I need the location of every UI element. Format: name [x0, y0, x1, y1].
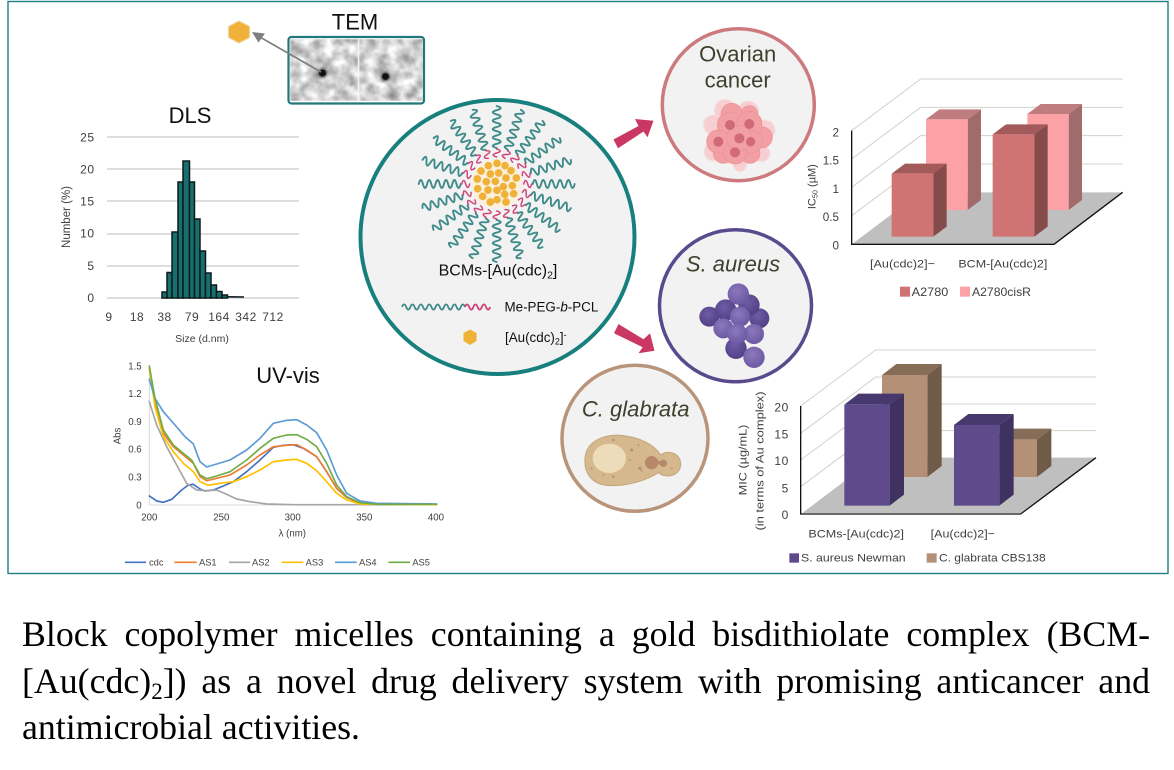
- chart: IC50 3D bars: 1.5: [823, 154, 839, 167]
- chart: DLS histogram: 164: [208, 310, 230, 324]
- chart: DLS histogram: [61, 130, 299, 345]
- chart: UV-vis spectra: 400: [428, 512, 444, 523]
- label: [Au(cdc)2]-: -: [564, 330, 567, 340]
- caption text: antimicrobial activities.: [22, 707, 360, 747]
- chart: DLS histogram: 9: [105, 310, 113, 324]
- chart: DLS histogram: 20: [80, 162, 94, 176]
- icon: tumour cell cluster: [703, 99, 775, 172]
- chart: IC50 3D bars: (µM): [807, 164, 819, 190]
- label: BCMs-[Au(cdc)2]: 2: [547, 270, 553, 282]
- chart: DLS histogram: 712: [262, 310, 284, 324]
- chart: UV-vis spectra: λ (nm): [279, 529, 306, 540]
- chart: IC50 3D bars: BCM-[Au(cdc)2]: [958, 258, 1047, 270]
- chart: IC50 3D bars: 0.5: [823, 211, 839, 224]
- chart: MIC 3D bars: BCMs-[Au(cdc)2]: [808, 528, 904, 540]
- label: [Au(cdc)2]-: 2: [555, 336, 560, 346]
- chart: DLS histogram: 5: [87, 259, 94, 273]
- panel: ovarian cancer circle: [662, 29, 814, 181]
- panel: S. aureus circle: [660, 230, 812, 382]
- chart: MIC 3D bars: [738, 350, 1096, 565]
- chart: DLS histogram: 342: [235, 310, 257, 324]
- chart: MIC 3D bars: 20: [774, 401, 789, 415]
- chart: DLS histogram: 38: [157, 310, 172, 324]
- diagram: micelle polymer chains and core: [419, 106, 575, 262]
- chart: DLS histogram: 18: [130, 310, 144, 324]
- bar: C. glabrata complex: [992, 429, 1051, 477]
- label: Ovarian cancer: [699, 42, 776, 93]
- panel: micelle circle: [360, 100, 634, 374]
- caption text: Block copolymer micelles containing a gold bisdithiolate complex (BCM-: [22, 614, 1150, 654]
- chart: IC50 3D bars: [Au(cdc)2]−: [870, 258, 935, 270]
- chart: MIC 3D bars: MIC (µg/mL): [738, 424, 750, 495]
- arrow: micelle to ovarian cancer: [614, 119, 654, 148]
- legend: cell lines: [900, 286, 1031, 299]
- chart: UV-vis spectra: [113, 361, 444, 567]
- chart: IC50 3D bars: 50: [811, 190, 820, 198]
- bar: A2780cisR complex: [926, 109, 981, 210]
- bar: S. aureus complex: [954, 414, 1014, 506]
- label: [Au(cdc)2]-: ]: [560, 330, 564, 345]
- caption text: [Au(cdc)2]) as a novel drug delivery system with promising anticancer and: [22, 660, 1150, 704]
- chart: MIC 3D bars: 10: [774, 454, 789, 468]
- label: Ovarian cancer: Ovarian: [699, 42, 776, 67]
- chart: UV-vis spectra: 250: [213, 512, 229, 523]
- chart: IC50 3D bars: [807, 79, 1123, 299]
- label: BCMs-[Au(cdc)2]: ]: [553, 262, 557, 280]
- chart: UV-vis spectra: Abs: [113, 428, 124, 444]
- legend: organisms: [789, 553, 1046, 565]
- heading: DLS: DLS: [169, 103, 211, 128]
- caption text: [22, 614, 1150, 747]
- icon: staphylococcus cluster: [699, 283, 769, 368]
- icon: gold complex hexagon: [228, 21, 250, 43]
- chart: UV-vis spectra: 200: [141, 512, 157, 523]
- legend: cell lines: A2780: [912, 286, 949, 299]
- chart: UV-vis spectra: 1.5: [128, 361, 142, 372]
- label: Ovarian cancer: cancer: [705, 68, 771, 93]
- chart: DLS histogram: 15: [80, 194, 94, 208]
- chart: UV-vis spectra: 300: [285, 512, 301, 523]
- chart: UV-vis spectra: 350: [356, 512, 372, 523]
- chart: UV-vis spectra: 0.9: [128, 417, 142, 428]
- heading: TEM: TEM: [332, 10, 378, 34]
- chart: MIC 3D bars: 0: [782, 508, 789, 522]
- legend: UV-vis series: AS3: [306, 557, 323, 567]
- chart: UV-vis spectra: 1.2: [128, 389, 142, 400]
- bar: A2780 complex: [892, 164, 947, 237]
- chart: IC50 3D bars: 2: [833, 127, 839, 140]
- bar: C. glabrata BCM: [882, 364, 942, 477]
- legend: UV-vis series: AS5: [412, 557, 430, 567]
- legend: organisms: S. aureus Newman: [801, 553, 906, 565]
- bar: A2780 BCM: [993, 124, 1048, 237]
- label: BCMs-[Au(cdc)2]: BCMs-[Au(cdc): [439, 262, 547, 280]
- chart: IC50 3D bars: IC: [807, 198, 819, 209]
- legend: UV-vis series: AS2: [252, 557, 270, 567]
- chart: UV-vis spectra: 0.6: [128, 445, 142, 456]
- chart: DLS histogram: Size (d.nm): [175, 333, 229, 345]
- legend: organisms: C. glabrata CBS138: [939, 553, 1046, 565]
- chart: MIC 3D bars: 15: [774, 427, 789, 441]
- chart: DLS histogram: 79: [185, 310, 199, 324]
- chart: MIC 3D bars: 5: [782, 481, 789, 495]
- label: C. glabrata: C. glabrata: [582, 397, 690, 422]
- legend: UV-vis series: [125, 557, 430, 567]
- chart: MIC 3D bars: [Au(cdc)2]−: [931, 528, 995, 540]
- legend: UV-vis series: AS4: [359, 557, 377, 567]
- arrow: micelle to microbes: [614, 324, 654, 353]
- chart: DLS histogram: 25: [80, 130, 94, 144]
- icon: legend hexagon: [464, 330, 476, 345]
- chart: UV-vis spectra: 0: [136, 500, 142, 511]
- chart: IC50 3D bars: 0: [833, 239, 840, 252]
- chart: DLS histogram: 0: [87, 291, 94, 305]
- bar: S. aureus BCM: [844, 394, 904, 506]
- outer frame: [8, 2, 1168, 574]
- bar: A2780cisR BCM: [1027, 104, 1082, 210]
- label: S. aureus: S. aureus: [686, 252, 780, 277]
- chart: UV-vis spectra: 0.3: [128, 472, 142, 483]
- legend: UV-vis series: cdc: [149, 557, 164, 567]
- arrow: TEM particle to hexagon: [252, 32, 321, 72]
- legend: cell lines: A2780cisR: [972, 286, 1031, 299]
- chart: IC50 3D bars: 1: [833, 183, 839, 196]
- chart: DLS histogram: Number (%): [61, 186, 73, 248]
- legend: UV-vis series: AS1: [199, 557, 217, 567]
- chart: DLS histogram: 10: [80, 226, 94, 240]
- chart: MIC 3D bars: (in terms of Au complex): [754, 391, 766, 530]
- heading: UV-vis: UV-vis: [256, 363, 320, 388]
- label: Me-PEG-b-PCL: Me-PEG-b-PCL: [504, 300, 598, 314]
- panel: C. glabrata circle: [562, 365, 708, 511]
- icon: yeast cell: [585, 435, 681, 486]
- panel: TEM micrographs: [288, 37, 424, 104]
- legend: polymer chain: [402, 304, 490, 310]
- label: [Au(cdc)2]-: [Au(cdc): [505, 330, 555, 345]
